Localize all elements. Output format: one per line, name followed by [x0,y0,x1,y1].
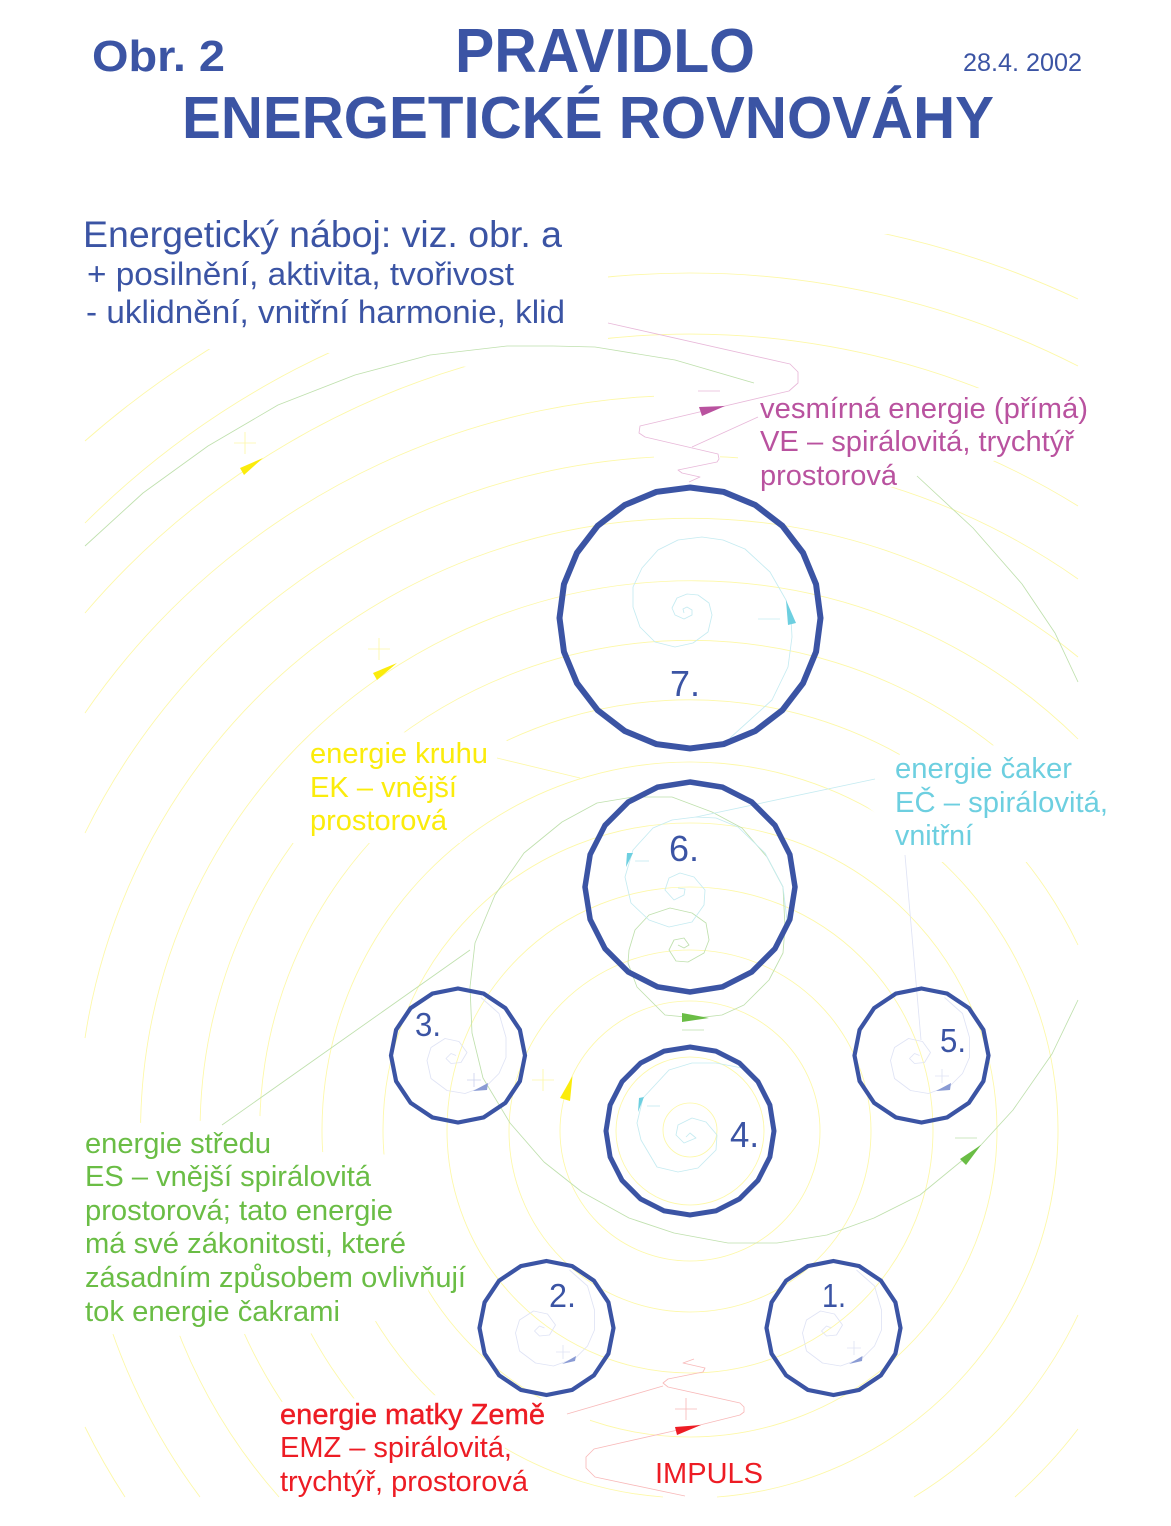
title line 2: ENERGETICKÉ ROVNOVÁHY [182,85,994,151]
energy charge legend: - uklidnění, vnitřní harmonie, klid [86,294,565,330]
label: central energy: ES – vnější spirálovitá [85,1161,371,1193]
label: chakra energy: energie čaker [895,753,1073,785]
label: energy of the circle: prostorová [310,805,447,837]
chakra 5 [854,855,988,1122]
label: chakra energy: EČ – spirálovitá, [895,787,1108,819]
label: chakra energy [895,753,1108,852]
label: central energy [85,1128,466,1328]
label: energy of the circle: energie kruhu [310,738,488,770]
chakra 2: 2. [549,1277,576,1314]
label: mother earth energy: EMZ – spirálovitá, [280,1432,512,1464]
chakra 6: 6. [669,828,699,869]
title line 1: PRAVIDLO [455,17,755,86]
chakra 2 [480,1261,614,1395]
chakra 1: 1. [822,1277,846,1314]
chakra 5: 5. [940,1022,966,1059]
yellow arrows and plus signs [234,432,580,1101]
label: central energy: má své zákonitosti, které [85,1228,406,1260]
label: central energy: tok energie čakrami [85,1296,340,1328]
label: impulse: IMPULS [655,1458,763,1490]
label: mother earth energy: energie matky Země [280,1399,545,1431]
label: cosmic energy [760,393,1088,492]
chakra 7 [560,488,820,748]
label: mother earth energy [280,1399,545,1498]
label: central energy: prostorová; tato energie [85,1195,393,1227]
chakra 3: 3. [415,1006,441,1043]
chakra 3 [391,988,525,1122]
label: chakra energy: vnitřní [895,820,973,852]
label: central energy: zásadním způsobem ovlivňují [85,1262,466,1294]
energy charge legend: + posilnění, aktivita, tvořivost [87,256,514,292]
label: cosmic energy: VE – spirálovitá, trychtýř [760,426,1075,458]
figure number: Obr. 2 [92,32,225,81]
label: cosmic energy: vesmírná energie (přímá) [760,393,1088,425]
chakra 1 [766,1261,900,1395]
central energy: green spiral [85,346,1078,1243]
date: 28.4. 2002 [963,49,1082,77]
label: cosmic energy: prostorová [760,460,897,492]
earth energy: red funnel spiral [567,1359,744,1496]
chakra 7: 7. [670,663,700,704]
energy of the circle: concentric yellow rings [85,213,1078,1497]
label: mother earth energy: trychtýř, prostorová [280,1466,528,1498]
energy charge legend: Energetický náboj: viz. obr. a [83,214,562,255]
energy charge legend [83,214,565,330]
chakra 4 [606,1047,774,1215]
label: central energy: energie středu [85,1128,271,1160]
chakra 6 [585,779,875,992]
chakra 4: 4. [730,1114,759,1155]
cosmic energy: pink funnel spiral [608,323,798,482]
label: energy of the circle: EK – vnější [310,772,457,804]
label: energy of the circle [310,738,488,837]
